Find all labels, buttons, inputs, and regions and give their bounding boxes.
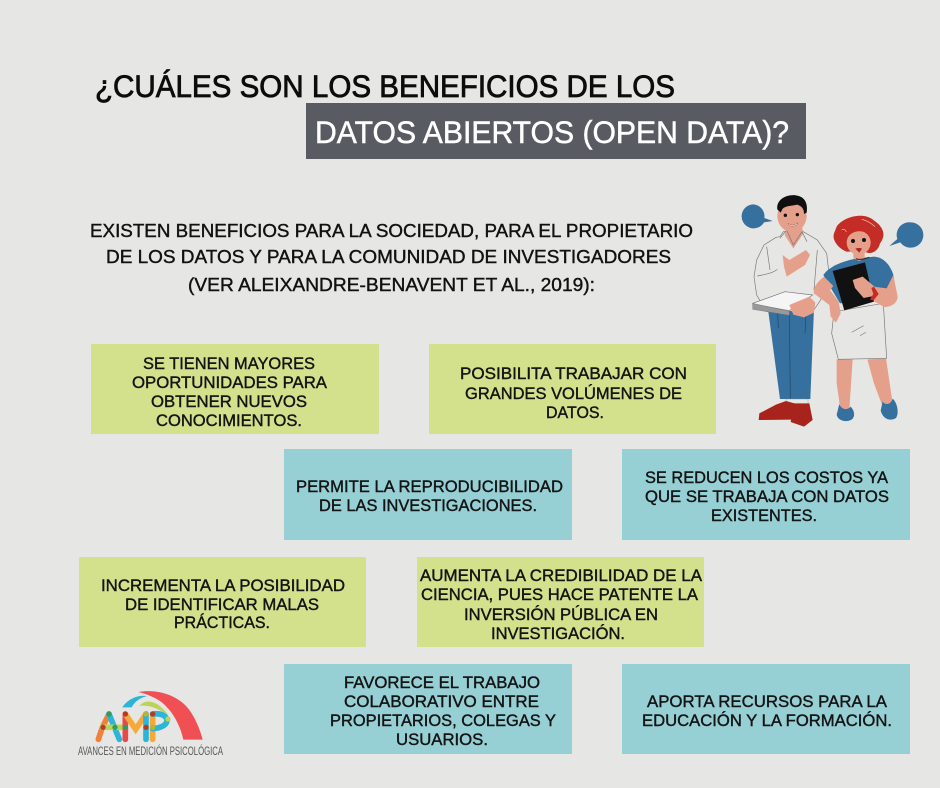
woman: [814, 216, 898, 421]
panel: box 1: [91, 344, 379, 434]
intro text: [90, 220, 693, 295]
panel: box 7: [284, 664, 572, 754]
panel: box 4: [622, 449, 910, 540]
panel: box 3: [284, 449, 572, 540]
panel: box 1: SE TIENEN MAYORES: [143, 355, 315, 373]
panel: box 5: [79, 557, 366, 647]
logo: AMP: AVANCES EN MEDICIÓN PSICOLÓGICA: [78, 745, 223, 758]
panel: box 7: FAVORECE EL TRABAJO: [344, 674, 540, 692]
panel: box 5: DE IDENTIFICAR MALAS: [125, 596, 319, 614]
panel: box 6: AUMENTA LA CREDIBILIDAD DE LA: [420, 567, 702, 585]
panel: box 8: EDUCACIÓN Y LA FORMACIÓN.: [642, 711, 892, 730]
panel: box 1: CONOCIMIENTOS.: [156, 412, 302, 430]
panel: box 3: DE LAS INVESTIGACIONES.: [319, 497, 537, 515]
panel: box 4: EXISTENTES.: [711, 507, 817, 525]
man: [753, 195, 829, 427]
panel: box 6: [417, 557, 704, 647]
panel: box 1: OBTENER NUEVOS: [151, 393, 307, 411]
panel: box 6: CIENCIA, PUES HACE PATENTE LA: [421, 586, 698, 604]
panel: box 2: [429, 344, 716, 434]
panel: box 5: PRÁCTICAS.: [174, 613, 270, 632]
title: [95, 68, 806, 159]
panel: box 2: DATOS.: [546, 404, 604, 422]
panel: box 8: [622, 664, 910, 754]
panel: box 2: GRANDES VOLÚMENES DE: [465, 384, 682, 403]
panel: box 6: INVESTIGACIÓN.: [491, 624, 625, 643]
panel: box 6: INVERSIÓN PÚBLICA EN: [464, 605, 658, 624]
icon: speech bubble right: [889, 222, 923, 248]
title: ¿CUÁLES SON LOS BENEFICIOS DE LOS: [95, 68, 675, 104]
title highlight box: [306, 103, 806, 159]
panel: box 1: OPORTUNIDADES PARA: [132, 374, 327, 392]
panel: box 7: COLABORATIVO ENTRE: [344, 693, 539, 711]
panel: box 7: USUARIOS.: [396, 731, 488, 749]
title highlight box: DATOS ABIERTOS (OPEN DATA)?: [315, 114, 789, 150]
panel: box 2: POSIBILITA TRABAJAR CON: [460, 365, 687, 383]
icon: speech bubble left: [742, 204, 773, 228]
intro text: DE LOS DATOS Y PARA LA COMUNIDAD DE INVESTIGADORES: [106, 246, 671, 267]
panel: box 4: SE REDUCEN LOS COSTOS YA: [645, 469, 888, 487]
panel: box 4: QUE SE TRABAJA CON DATOS: [645, 488, 889, 506]
panel: box 8: APORTA RECURSOS PARA LA: [647, 693, 887, 711]
panel: box 3: PERMITE LA REPRODUCIBILIDAD: [296, 478, 563, 496]
panel: box 7: PROPIETARIOS, COLEGAS Y: [330, 712, 556, 730]
illustration: two researchers: [742, 195, 923, 427]
intro text: EXISTEN BENEFICIOS PARA LA SOCIEDAD, PARA EL PROPIETARIO: [90, 220, 693, 241]
logo: AMP: [78, 691, 223, 758]
icon: logo arch: [138, 691, 203, 740]
panel: box 5: INCREMENTA LA POSIBILIDAD: [101, 577, 345, 595]
intro text: (VER ALEIXANDRE-BENAVENT ET AL., 2019):: [188, 274, 595, 295]
